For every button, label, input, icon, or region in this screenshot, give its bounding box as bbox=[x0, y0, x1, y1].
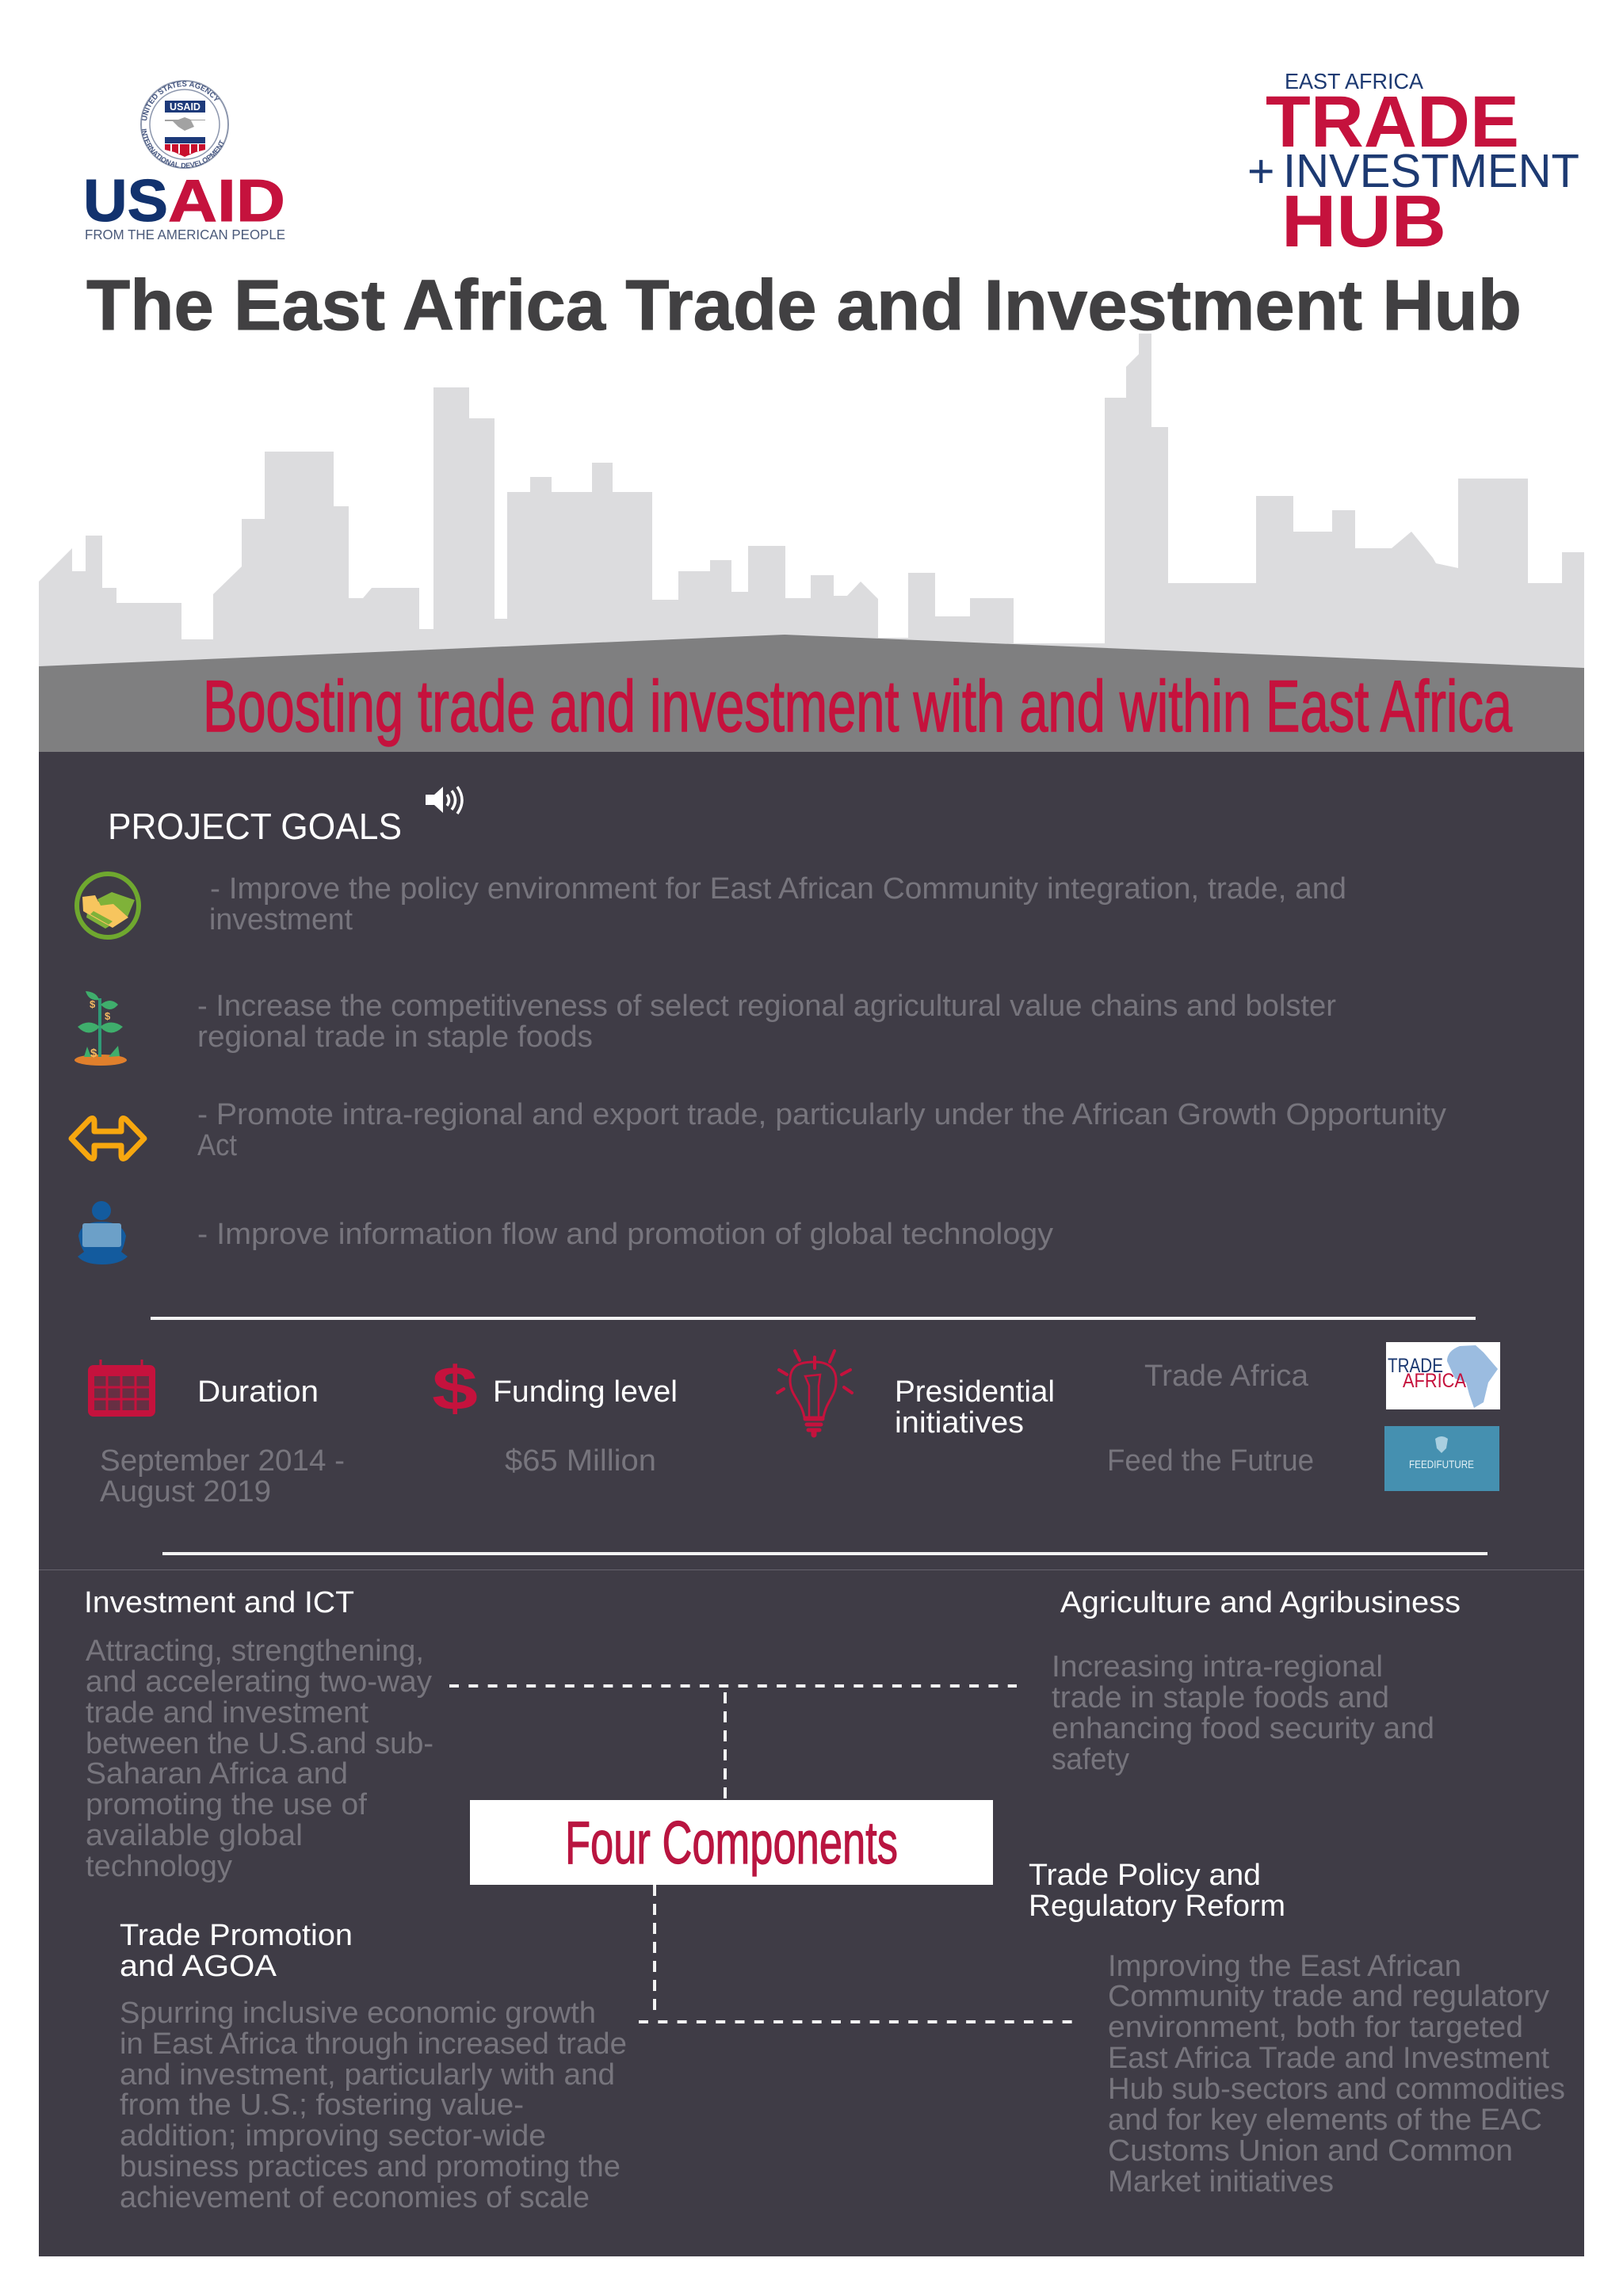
body text: Community trade and regulatory bbox=[1108, 1980, 1549, 2013]
component: trade policy and regulatory reform bbox=[1029, 1859, 1565, 2199]
icon: USAID seal: INTERNATIONAL DEVELOPMENT bbox=[141, 128, 223, 168]
goal text: - Improve information flow and promotion of global technology bbox=[197, 1218, 1053, 1251]
heading bbox=[120, 1919, 353, 1983]
icon: speaker bbox=[426, 787, 462, 814]
body text: addition; improving sector-wide bbox=[120, 2119, 546, 2153]
wordmark: USAID: AID bbox=[168, 167, 285, 234]
body text: achievement of economies of scale bbox=[120, 2181, 590, 2214]
tagline: FROM THE AMERICAN PEOPLE bbox=[85, 227, 285, 242]
logo: East Africa Trade + Investment Hub: INVESTMENT bbox=[1283, 145, 1579, 197]
logo: East Africa Trade + Investment Hub: EAST AFRICA bbox=[1285, 69, 1423, 93]
label: Presidential bbox=[895, 1375, 1055, 1409]
heading: Trade Policy and bbox=[1029, 1859, 1261, 1892]
logo: feed the future bbox=[1384, 1426, 1499, 1491]
body text: trade in staple foods and bbox=[1052, 1681, 1389, 1714]
body text: available global bbox=[86, 1819, 303, 1852]
goal text: Act bbox=[197, 1129, 237, 1162]
icon: double arrow bbox=[71, 1119, 144, 1158]
body text: between the U.S.and sub- bbox=[86, 1727, 433, 1760]
value: $65 Million bbox=[505, 1444, 656, 1478]
goal text: - Increase the competitiveness of select regional agricultural value chains and bolster bbox=[197, 990, 1336, 1023]
component: investment and ICT bbox=[84, 1586, 433, 1883]
body text: Hub sub-sectors and commodities bbox=[1108, 2073, 1565, 2106]
body text: promoting the use of bbox=[86, 1788, 367, 1821]
body text: Customs Union and Common bbox=[1108, 2134, 1513, 2168]
goal text: regional trade in staple foods bbox=[197, 1020, 593, 1054]
initiative: feed the future: Feed the Futrue bbox=[1107, 1444, 1314, 1478]
value: August 2019 bbox=[100, 1475, 271, 1508]
logo: trade africa bbox=[1386, 1342, 1500, 1409]
body text: Saharan Africa and bbox=[86, 1757, 348, 1791]
heading: project goals: PROJECT GOALS bbox=[108, 806, 402, 847]
goal text bbox=[209, 872, 1346, 936]
body text bbox=[1052, 1650, 1434, 1776]
body text: Attracting, strengthening, bbox=[86, 1634, 424, 1668]
body text: from the U.S.; fostering value- bbox=[120, 2088, 524, 2122]
logo: East Africa Trade + Investment Hub: TRADE bbox=[1266, 82, 1519, 162]
body text: and for key elements of the EAC bbox=[1108, 2103, 1542, 2137]
body text: and investment, particularly with and bbox=[120, 2058, 615, 2092]
icon: USAID seal: UNITED STATES AGENCY bbox=[141, 81, 220, 120]
icon: money plant: $ bbox=[90, 1047, 97, 1060]
title: The East Africa Trade and Investment Hub bbox=[86, 266, 1522, 345]
body text: Improving the East African bbox=[1108, 1950, 1461, 1983]
panel: dark content background bbox=[39, 752, 1584, 2256]
body text: safety bbox=[1052, 1743, 1129, 1776]
body text: and accelerating two-way bbox=[86, 1665, 432, 1699]
component: trade promotion and AGOA bbox=[120, 1919, 627, 2214]
heading: Regulatory Reform bbox=[1029, 1890, 1285, 1923]
goal text: - Promote intra-regional and export trade, particularly under the African Growth Opportunity bbox=[197, 1098, 1446, 1131]
component: agriculture and agribusiness bbox=[1052, 1586, 1461, 1776]
heading: and AGOA bbox=[120, 1950, 277, 1983]
icon: dollar sign: $ bbox=[432, 1353, 478, 1423]
body text bbox=[1108, 1950, 1565, 2199]
panel: funding level bbox=[432, 1353, 678, 1478]
body text: trade and investment bbox=[86, 1696, 369, 1730]
logo: East Africa Trade + Investment Hub: + bbox=[1247, 145, 1274, 197]
icon: USAID seal bbox=[140, 80, 229, 169]
goal 1 bbox=[77, 872, 1346, 937]
wordmark: USAID bbox=[83, 167, 285, 234]
icon: money plant bbox=[74, 991, 127, 1066]
body text: technology bbox=[86, 1850, 232, 1883]
goal 3 bbox=[71, 1098, 1446, 1162]
value: September 2014 - bbox=[100, 1444, 345, 1478]
logo: USAID bbox=[83, 80, 285, 242]
heading: Trade Promotion bbox=[120, 1919, 353, 1952]
body text bbox=[120, 1997, 627, 2214]
icon: money plant: $ bbox=[105, 1010, 111, 1022]
body text: environment, both for targeted bbox=[1108, 2011, 1523, 2044]
body text bbox=[86, 1634, 433, 1883]
heading: Investment and ICT bbox=[84, 1586, 354, 1619]
goal text bbox=[197, 990, 1336, 1054]
icon: money plant: $ bbox=[90, 998, 96, 1010]
goal 2 bbox=[74, 990, 1336, 1066]
panel: presidential initiatives bbox=[777, 1342, 1500, 1491]
icon: person at laptop bbox=[78, 1201, 128, 1264]
center box: four components bbox=[470, 1800, 993, 1885]
panel: duration bbox=[88, 1360, 345, 1508]
label: Duration bbox=[197, 1375, 319, 1409]
city skyline bbox=[39, 334, 1584, 673]
wordmark: USAID: US bbox=[83, 167, 168, 234]
center box label: Four Components bbox=[565, 1810, 898, 1877]
icon: USAID seal: USAID bbox=[170, 101, 200, 113]
logo: trade africa: TRADE bbox=[1388, 1355, 1443, 1377]
body text: Spurring inclusive economic growth bbox=[120, 1997, 596, 2030]
body text: enhancing food security and bbox=[1052, 1712, 1434, 1745]
body text: in East Africa through increased trade bbox=[120, 2027, 627, 2061]
label: initiatives bbox=[895, 1406, 1024, 1440]
value bbox=[100, 1444, 345, 1508]
body text: Market initiatives bbox=[1108, 2165, 1334, 2199]
banner bbox=[39, 635, 1584, 753]
initiative: trade africa: Trade Africa bbox=[1144, 1360, 1309, 1393]
goal text bbox=[197, 1098, 1446, 1162]
logo: feed the future: FEEDIFUTURE bbox=[1409, 1458, 1474, 1470]
goal text: - Improve the policy environment for East African Community integration, trade, and bbox=[210, 872, 1346, 906]
icon: handshake bbox=[77, 874, 139, 937]
logo: East Africa Trade + Investment Hub: HUB bbox=[1281, 180, 1446, 262]
heading bbox=[1029, 1859, 1285, 1923]
goal 4 bbox=[78, 1201, 1053, 1264]
body text: Increasing intra-regional bbox=[1052, 1650, 1383, 1684]
heading: Agriculture and Agribusiness bbox=[1060, 1586, 1461, 1619]
label: Funding level bbox=[493, 1375, 678, 1409]
logo: East Africa Trade + Investment Hub bbox=[1247, 69, 1579, 262]
icon: light bulb bbox=[777, 1351, 852, 1435]
body text: East Africa Trade and Investment bbox=[1108, 2042, 1549, 2075]
body text: business practices and promoting the bbox=[120, 2150, 621, 2183]
connector: dashed lines bbox=[449, 1686, 1075, 2022]
label bbox=[895, 1375, 1055, 1440]
logo: trade africa: AFRICA bbox=[1403, 1370, 1466, 1392]
goal text: investment bbox=[209, 903, 353, 936]
icon: calendar bbox=[88, 1360, 155, 1417]
